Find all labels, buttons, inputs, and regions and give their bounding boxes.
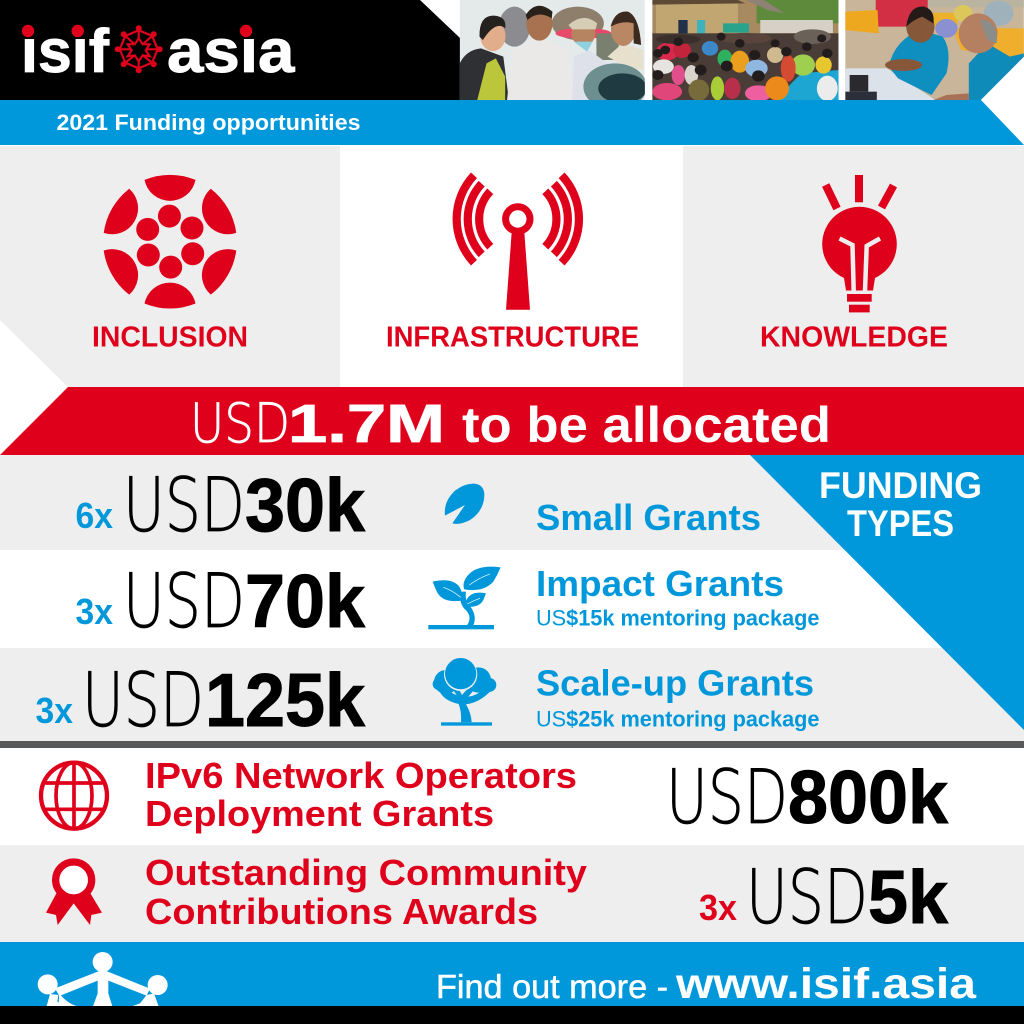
header black banner <box>0 0 460 100</box>
row: small grants: Small Grants <box>536 497 761 538</box>
row: impact grants: Impact Grants <box>536 563 784 604</box>
row: scale-up grants: 125k <box>205 658 365 742</box>
footer <box>0 942 1024 1024</box>
row: IPv6 grants <box>0 748 1024 845</box>
row backgrounds <box>0 455 1024 741</box>
photo: technicians at workshop <box>845 0 1024 100</box>
funding types triangle: TYPES <box>847 503 954 544</box>
panel: total allocation banner: to be allocated <box>462 397 831 453</box>
logo: isif asia: isif <box>21 17 110 85</box>
row: community awards: USD <box>746 853 868 941</box>
funding types triangle <box>750 455 1024 730</box>
label: INCLUSION: INCLUSION <box>92 322 248 354</box>
icon: antenna <box>457 175 579 310</box>
footer: Find out more - <box>436 968 668 1005</box>
row: impact grants: 70k <box>245 559 365 643</box>
icon: tree <box>433 658 496 726</box>
icon: inclusion wheel <box>99 175 241 309</box>
icon: award ribbon <box>46 862 102 925</box>
blue banner <box>0 100 1024 145</box>
icon: globe <box>41 763 107 829</box>
row: small grants: 6x <box>76 495 113 536</box>
label: KNOWLEDGE: KNOWLEDGE <box>760 322 948 354</box>
row: community awards <box>0 845 1024 942</box>
row: small grants <box>76 461 761 549</box>
row: scale-up grants: 3x <box>36 690 73 731</box>
row: community awards: Contributions Awards <box>145 891 538 932</box>
footer: www.isif.asia <box>675 960 977 1008</box>
panel: total allocation banner: USD <box>190 392 290 455</box>
row: impact grants <box>76 557 820 645</box>
row: community awards: 5k <box>868 855 948 939</box>
row: IPv6 grants: IPv6 Network Operators <box>145 755 577 796</box>
heading: 2021 Funding opportunities: 2021 Funding opportunities <box>56 110 360 135</box>
label: INFRASTRUCTURE: INFRASTRUCTURE <box>386 322 639 354</box>
row: scale-up grants: USD <box>82 656 204 744</box>
panel: infrastructure <box>340 146 683 387</box>
panel: total allocation banner <box>0 387 1024 455</box>
row: small grants: USD <box>123 461 245 549</box>
funding types triangle: FUNDING <box>819 465 982 506</box>
logo: isif asia: asia <box>167 17 296 85</box>
icon: light bulb <box>822 175 897 312</box>
row: small grants: 30k <box>245 463 365 547</box>
panel: total allocation banner: 1.7M <box>288 394 445 454</box>
row: impact grants: US$15k mentoring package <box>536 606 820 631</box>
icon: seed leaf <box>445 484 484 524</box>
panel: knowledge <box>683 146 1024 387</box>
white left chevron <box>0 320 68 455</box>
panel: inclusion <box>0 146 340 387</box>
icon: sprout <box>428 567 501 629</box>
row: IPv6 grants: Deployment Grants <box>145 793 494 834</box>
row: scale-up grants: Scale-up Grants <box>536 662 814 704</box>
divider bar <box>0 741 1024 748</box>
logo: isif asia <box>20 17 296 85</box>
icon: people holding hands <box>38 952 168 1008</box>
row: IPv6 grants: USD <box>666 753 788 841</box>
photo: village meeting <box>652 0 838 101</box>
row: impact grants: 3x <box>76 591 113 632</box>
row: IPv6 grants: 800k <box>788 755 948 839</box>
row: community awards: 3x <box>699 887 737 928</box>
row: impact grants: USD <box>123 557 245 645</box>
photo: community members <box>460 0 647 110</box>
row: scale-up grants: US$25k mentoring package <box>536 707 820 732</box>
row: community awards: Outstanding Community <box>145 852 587 893</box>
row: scale-up grants <box>36 656 820 744</box>
header photographs <box>460 0 1024 110</box>
